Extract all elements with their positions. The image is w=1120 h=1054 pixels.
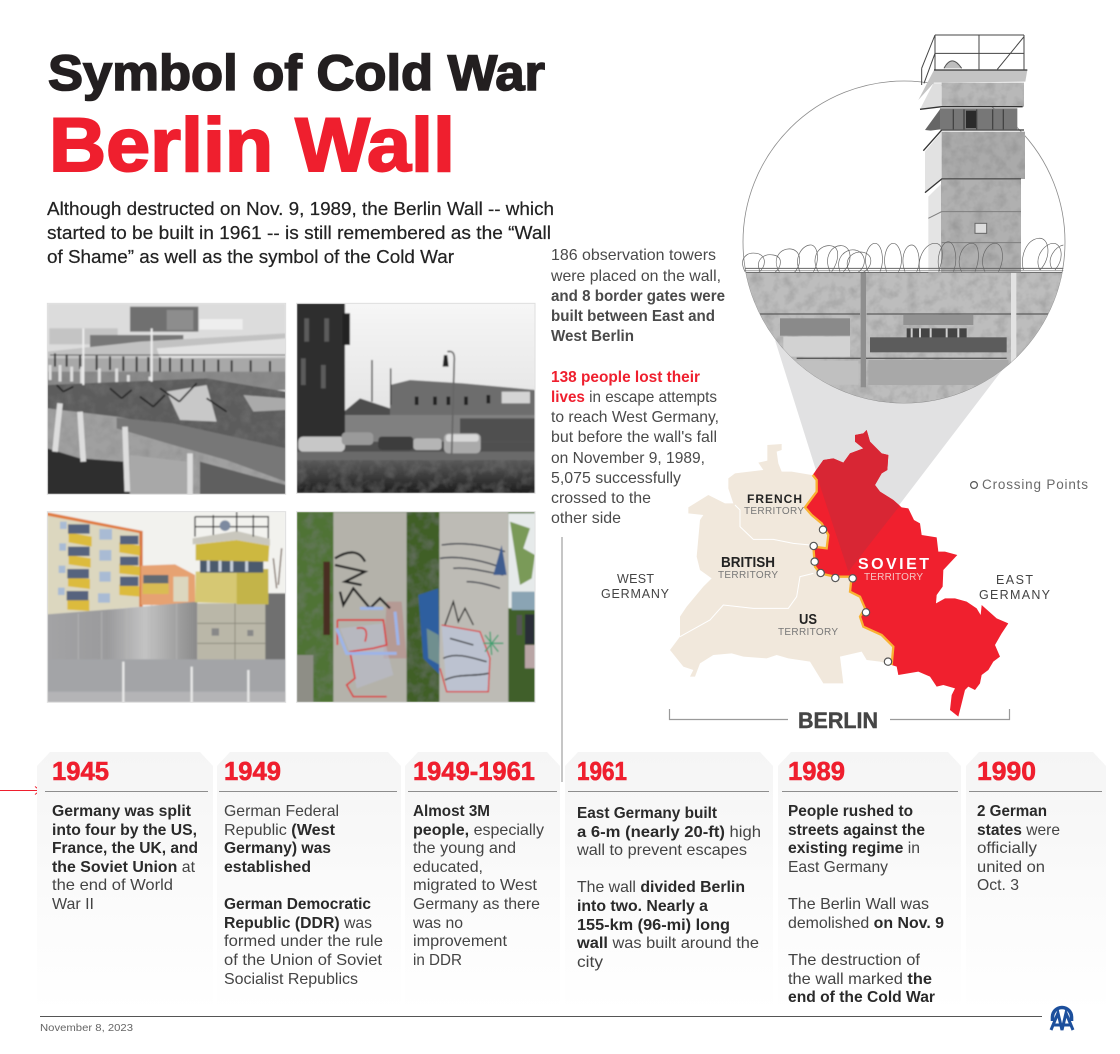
card: 1945: into four by the US,	[52, 822, 197, 839]
intro text: started to be built in 1961 -- is still remembered as the “Wall	[47, 223, 551, 243]
card: 1945: the Soviet Union at	[52, 859, 196, 876]
side text: 138 people lost their	[551, 369, 700, 386]
card: 1961: a 6-m (nearly 20-ft) high	[577, 824, 761, 841]
legend: crossing points: Crossing Points	[982, 477, 1088, 492]
card: 1989: end of the Cold War	[788, 989, 935, 1006]
side text: on November 9, 1989,	[551, 450, 705, 467]
intro text: Although destructed on Nov. 9, 1989, the Berlin Wall -- which	[47, 199, 554, 219]
card: 1961: East Germany built	[577, 805, 718, 822]
card: 1949-1961: in DDR	[413, 952, 462, 969]
wall section	[740, 272, 1070, 406]
card: 1989: existing regime in	[788, 840, 920, 857]
card: 1949: Germany) was	[224, 840, 331, 857]
map labels: FRENCH	[747, 492, 802, 506]
card: 1949-1961	[405, 752, 560, 1012]
card: 1989: demolished on Nov. 9	[788, 915, 944, 932]
map labels: WEST	[617, 572, 654, 586]
card: 1945: War II	[52, 896, 94, 913]
card: 1990: officially	[977, 840, 1037, 857]
card: 1945	[37, 752, 213, 1012]
map labels: SOVIET	[858, 556, 929, 573]
card: 1945: France, the UK, and	[52, 840, 198, 857]
footer rule	[40, 1016, 1042, 1018]
card: 1989: The Berlin Wall was	[788, 896, 929, 913]
card: 1949-1961: Almost 3M	[413, 803, 490, 820]
card: 1989	[778, 752, 961, 1012]
zoom cone from map to tower circle	[775, 340, 1016, 572]
card: 1989: 1989	[788, 756, 845, 786]
card: 1990	[966, 752, 1106, 1012]
tower	[918, 35, 1027, 272]
arrow to timeline	[0, 786, 40, 794]
card: 1990: 2 German	[977, 803, 1047, 820]
card: 1989: People rushed to	[788, 803, 913, 820]
card: 1949-1961: improvement	[413, 933, 508, 950]
card: 1949-1961: the young and	[413, 840, 516, 857]
photo: wall and tank traps, black and white	[47, 303, 286, 494]
card: 1949: 1949	[224, 756, 281, 786]
card: 1961: 155-km (96-mi) long	[577, 917, 730, 934]
map sectors	[670, 430, 1008, 716]
card: 1989: the wall marked the	[788, 971, 932, 988]
side text: crossed to the	[551, 490, 651, 507]
photo grid	[47, 303, 535, 702]
card: 1961: The wall divided Berlin	[577, 879, 745, 896]
map labels: GERMANY	[979, 588, 1051, 602]
map labels: US	[799, 612, 817, 628]
card: 1949: Socialist Republics	[224, 971, 358, 988]
title: Symbol of Cold War	[48, 45, 545, 101]
map labels: TERRITORY	[718, 570, 778, 581]
card: 1989: The destruction of	[788, 952, 921, 969]
side text: and 8 border gates were	[551, 288, 725, 305]
side text: but before the wall's fall	[551, 429, 717, 446]
Berlin bracket label: BERLIN	[798, 708, 878, 733]
intro text: of Shame” as well as the symbol of the Cold War	[47, 247, 454, 267]
card: 1990: 1990	[977, 756, 1036, 786]
vertical connector line	[561, 537, 563, 782]
photo: graffiti wall segments among trees	[297, 512, 535, 702]
card: 1990: united on	[977, 859, 1045, 876]
card: 1989: East Germany	[788, 859, 888, 876]
card: 1949-1961: migrated to West	[413, 877, 538, 894]
card: 1961: into two. Nearly a	[577, 898, 708, 915]
card: 1949: formed under the rule	[224, 933, 383, 950]
card: 1949: Republic (West	[224, 822, 336, 839]
card: 1961	[565, 752, 773, 1012]
card: 1949-1961: people, especially	[413, 822, 544, 839]
icon: Anadolu Agency logo	[1051, 1008, 1073, 1030]
side text: to reach West Germany,	[551, 409, 719, 426]
map labels: EAST	[996, 573, 1033, 587]
map labels: TERRITORY	[778, 627, 838, 638]
side text: other side	[551, 510, 621, 527]
razor wire coils	[743, 238, 1063, 273]
date: November 8, 2023	[40, 1022, 133, 1034]
card: 1949: German Federal	[224, 803, 339, 820]
timeline	[37, 752, 1106, 1012]
title: Berlin Wall	[49, 103, 455, 188]
watchtower circle illustration	[740, 35, 1070, 406]
map labels: TERRITORY	[864, 572, 923, 583]
map labels: GERMANY	[601, 587, 670, 601]
card: 1961: 1961	[577, 756, 627, 786]
card: 1989: streets against the	[788, 822, 925, 839]
photo: street with ruins and cars, black and white	[297, 303, 535, 493]
side text: 5,075 successfully	[551, 470, 681, 487]
card: 1990: states were	[977, 822, 1060, 839]
map labels: BRITISH	[721, 555, 775, 571]
card: 1945: 1945	[52, 756, 109, 786]
side text: West Berlin	[551, 328, 634, 345]
card: 1949: Republic (DDR) was	[224, 915, 372, 932]
side text: lives in escape attempts	[551, 389, 717, 406]
side text: 186 observation towers	[551, 247, 716, 264]
card: 1945: Germany was split	[52, 803, 192, 820]
card: 1949: German Democratic	[224, 896, 371, 913]
card: 1945: the end of World	[52, 877, 173, 894]
Berlin sector map	[602, 430, 1088, 728]
card: 1949-1961: Germany as there	[413, 896, 540, 913]
card: 1949-1961: 1949-1961	[413, 756, 535, 786]
card: 1961: wall was built around the	[576, 935, 759, 952]
map labels: TERRITORY	[744, 506, 804, 517]
card: 1949-1961: educated,	[413, 859, 483, 876]
side text: built between East and	[551, 308, 715, 325]
card: 1949	[217, 752, 401, 1012]
photo frames	[47, 303, 535, 702]
Berlin bracket label	[670, 708, 1010, 733]
side text	[550, 247, 725, 527]
card: 1949-1961: was no	[412, 915, 463, 932]
photo: colour watchtower and apartment block	[47, 512, 286, 702]
side text: were placed on the wall,	[550, 268, 721, 285]
map labels	[601, 492, 1051, 638]
title	[48, 45, 545, 188]
intro text	[47, 199, 554, 267]
card: 1961: city	[577, 954, 603, 971]
card: 1949: of the Union of Soviet	[224, 952, 383, 969]
card: 1961: wall to prevent escapes	[576, 842, 747, 859]
card: 1990: Oct. 3	[977, 877, 1019, 894]
card: 1949: established	[224, 859, 311, 876]
